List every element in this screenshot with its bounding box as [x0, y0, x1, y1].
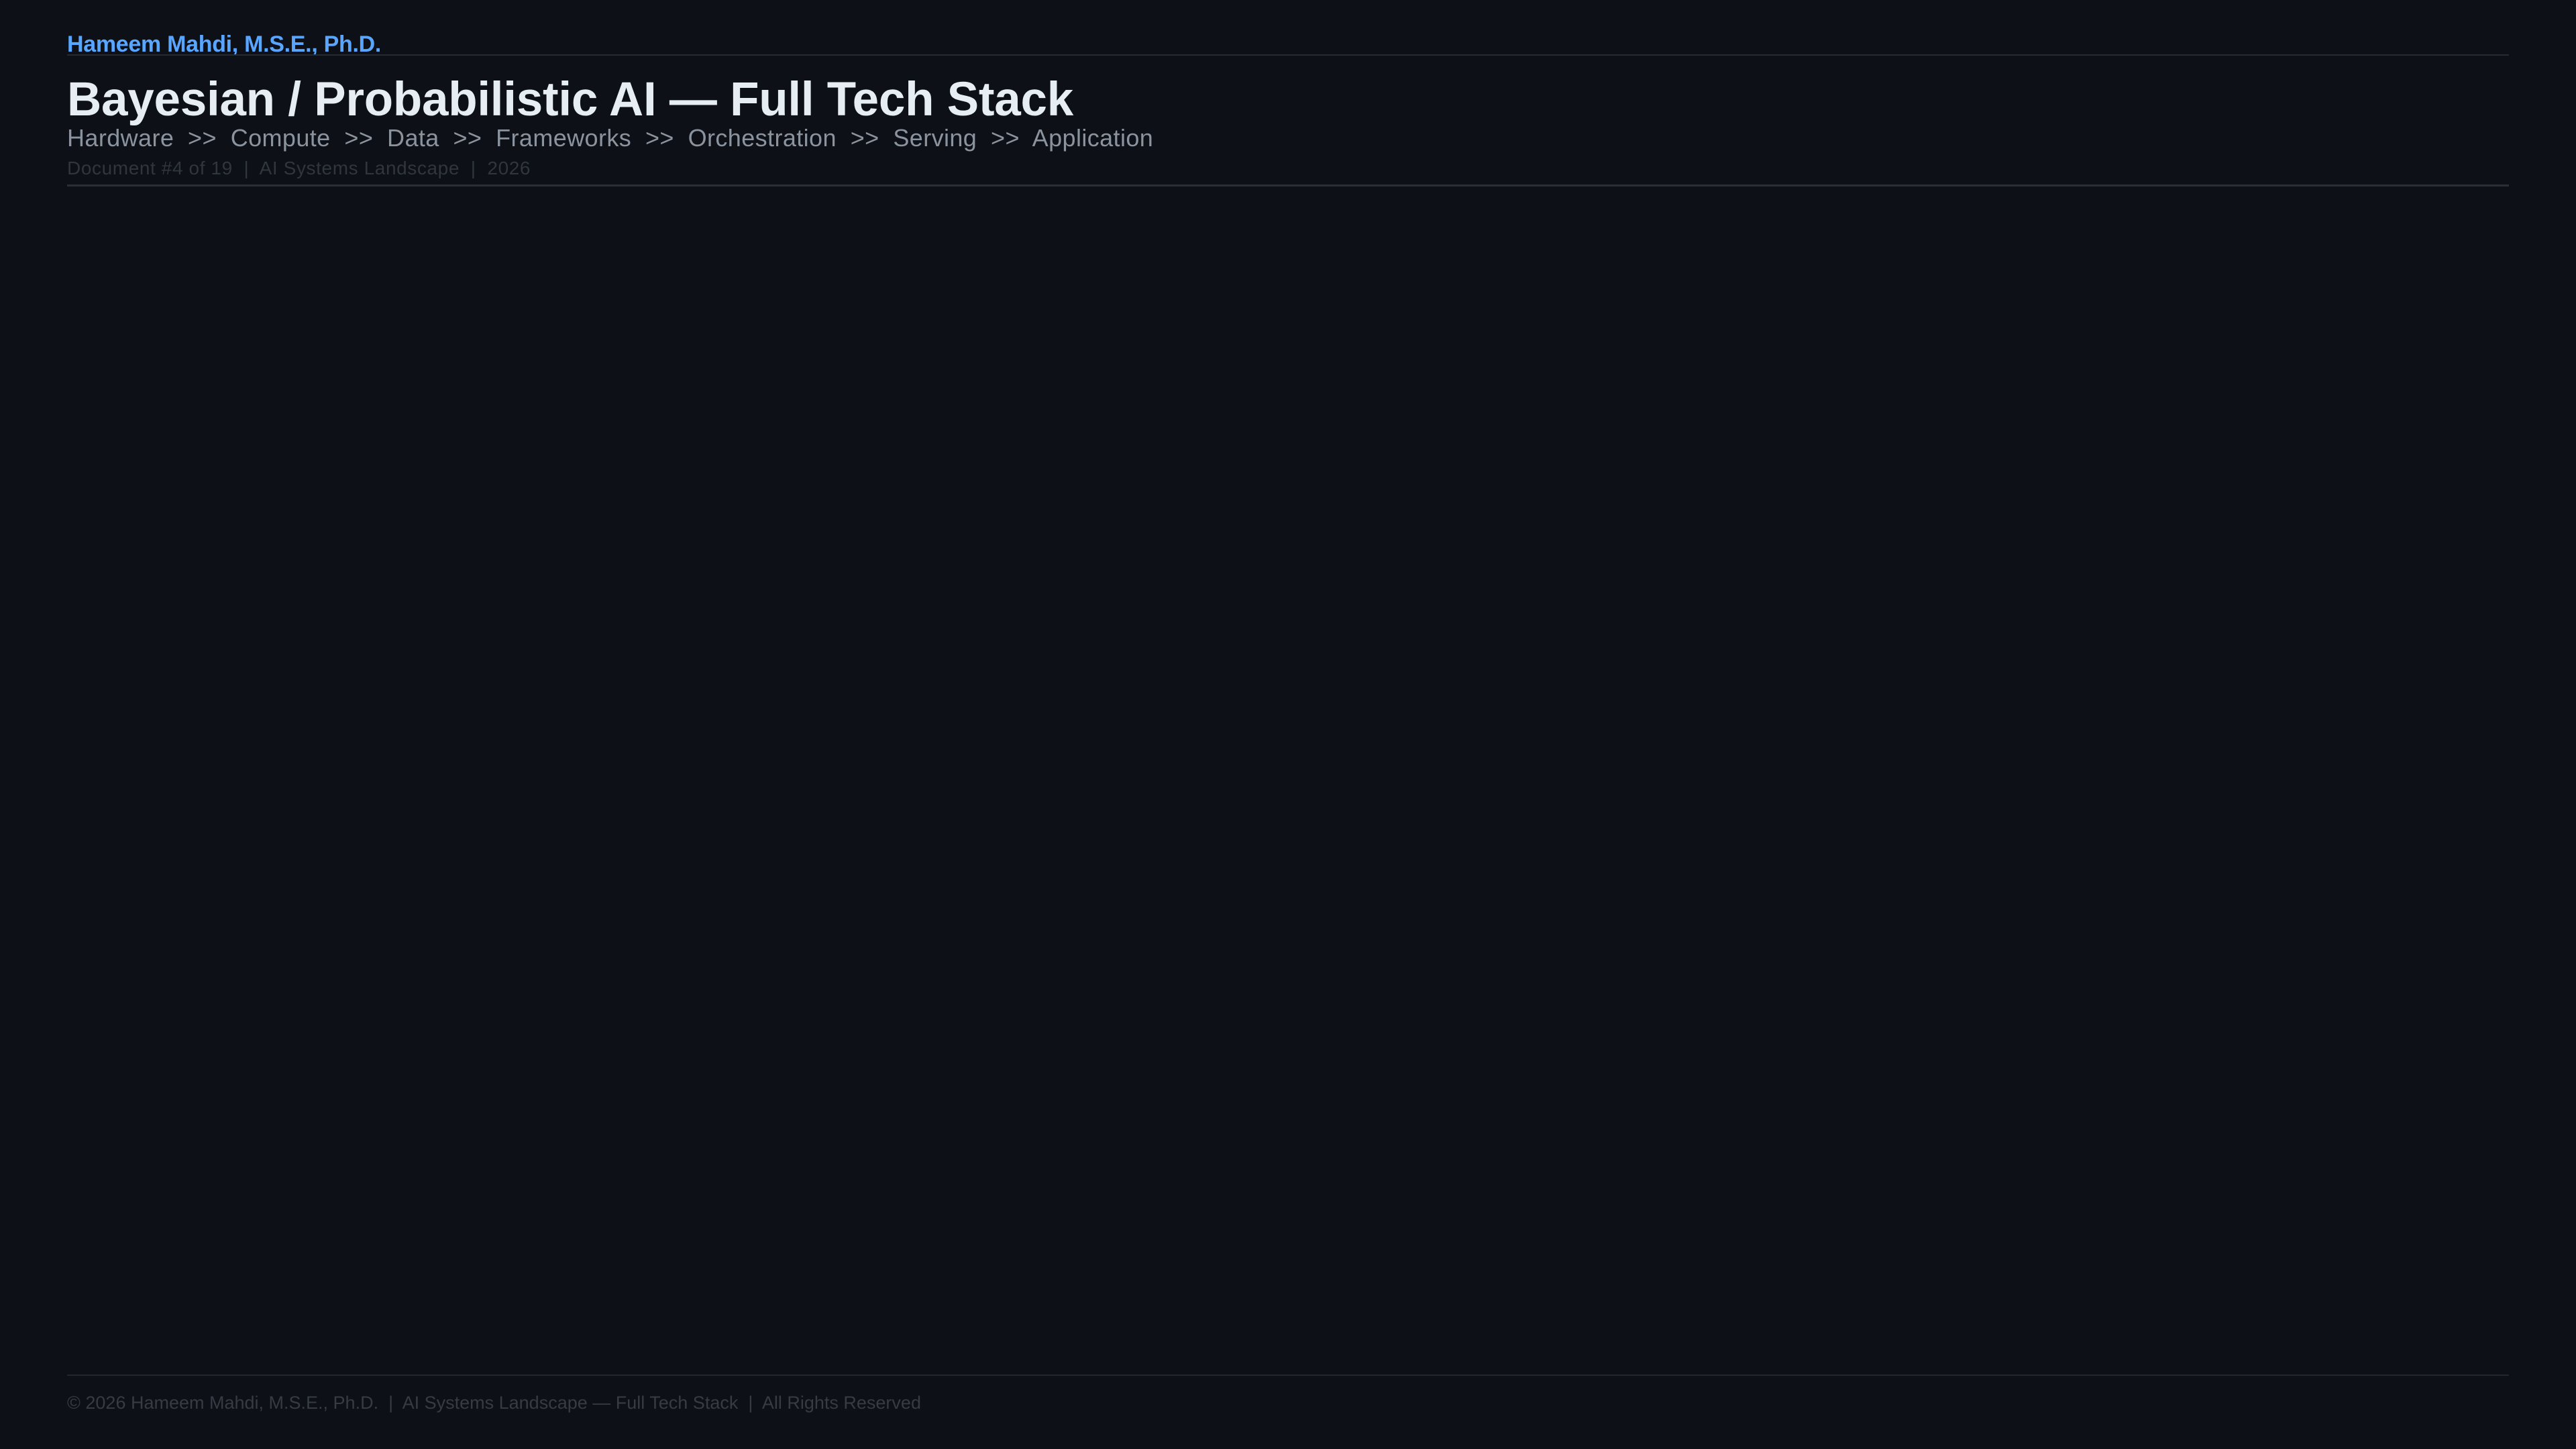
author name: Hameem Mahdi, M.S.E., Ph.D.	[67, 32, 381, 57]
title: Bayesian / Probabilistic AI — Full Tech Stack	[67, 73, 1073, 126]
stack layers subtitle: Hardware >> Compute >> Data >> Frameworks >> Orchestration >> Serving >> Application	[67, 124, 1153, 152]
document info line: Document #4 of 19 | AI Systems Landscape | 2026	[67, 158, 531, 178]
footer copyright: © 2026 Hameem Mahdi, M.S.E., Ph.D. | AI Systems Landscape — Full Tech Stack | All Rights Reserved	[67, 1393, 921, 1413]
